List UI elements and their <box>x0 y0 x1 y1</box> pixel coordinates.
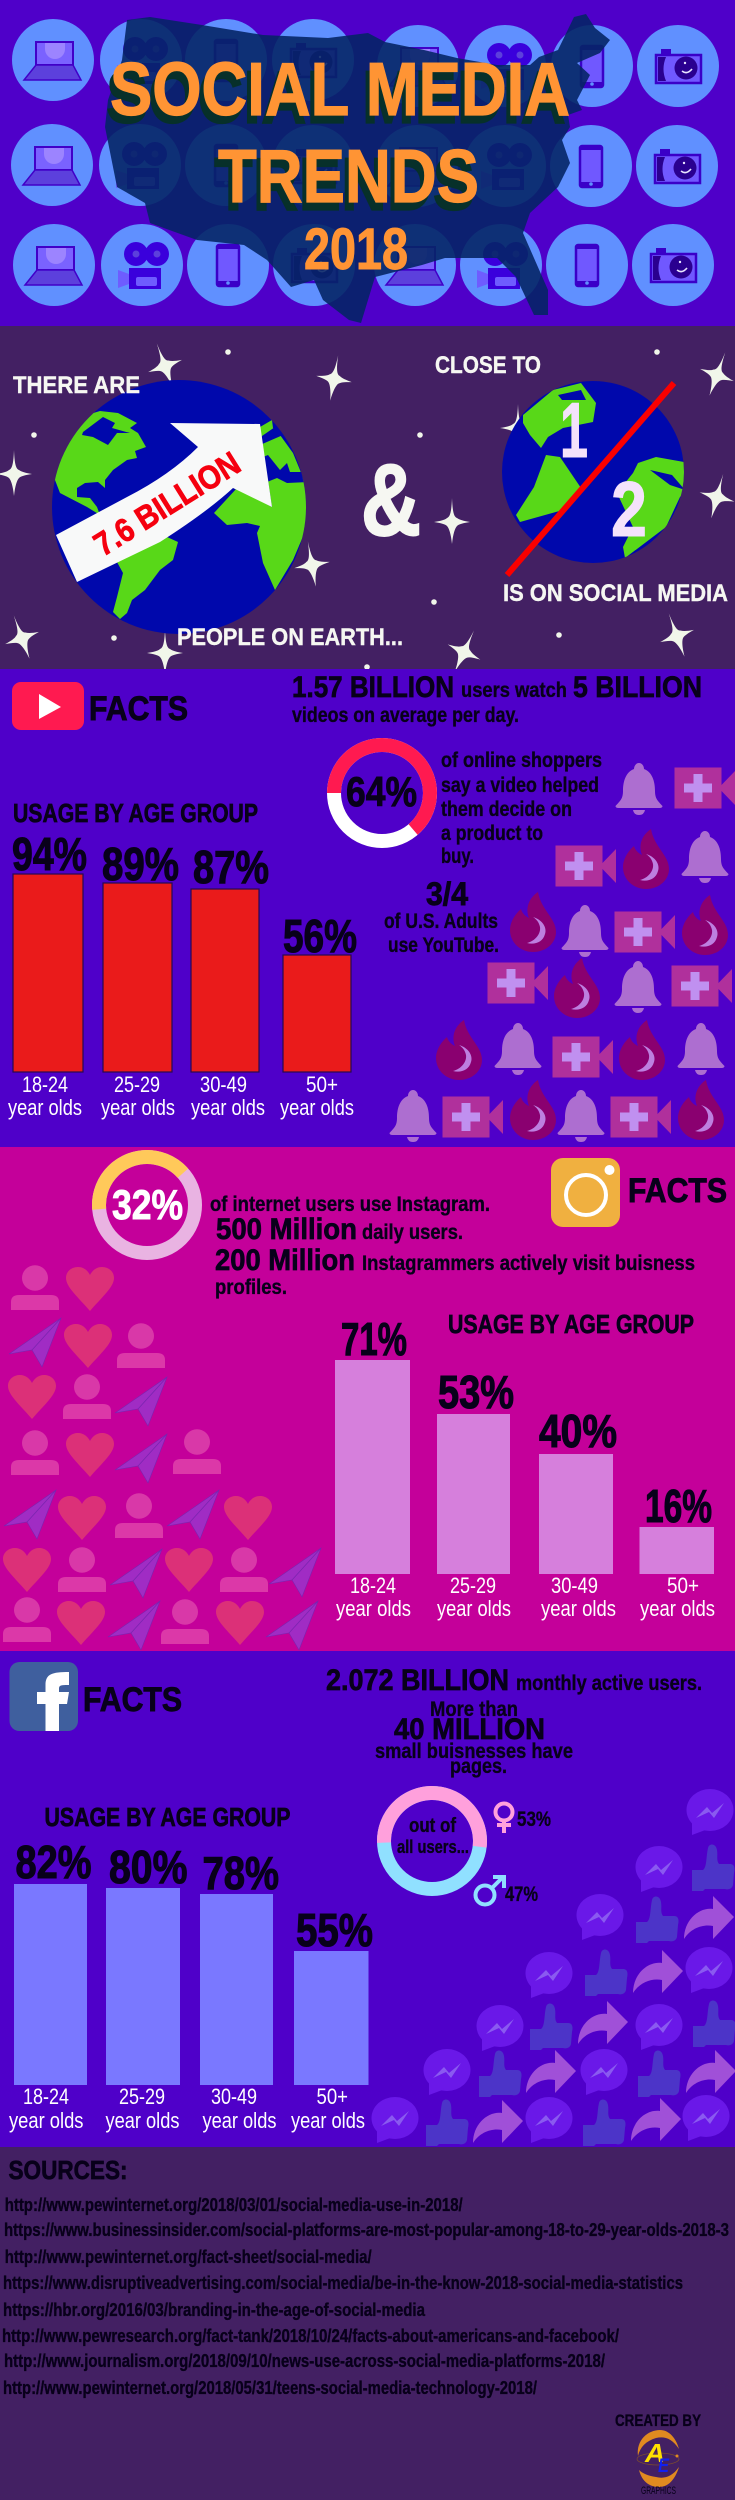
panel: Facebook facts <box>0 1651 735 2147</box>
text: source links: https://hbr.org/2016/03/branding-in-the-age-of-social-media <box>3 2300 426 2320</box>
bar: 18-24: 94% <box>12 828 87 880</box>
title: Social Media Trends 2018: TRENDS <box>218 134 479 218</box>
chart: gender donut <box>382 1791 482 1891</box>
bar: 25-29 <box>437 1366 514 1621</box>
bar: 50+: year olds <box>291 2108 365 2133</box>
title: Social Media Trends 2018: TRENDS <box>214 142 475 226</box>
legend: female 53%: 53% <box>517 1808 551 1831</box>
bar: 18-24: 18-24 <box>350 1573 396 1598</box>
icon: large earth with arrow <box>50 380 310 634</box>
logo: AE Graphics: E <box>658 2456 670 2477</box>
bar: 25-29: 80% <box>109 1841 188 1893</box>
text: Instagram statistics: 500 Million <box>216 1213 357 1246</box>
icon: Instagram logo <box>551 1158 620 1227</box>
heading: Facebook facts: FACTS <box>83 1681 182 1719</box>
bar: 50+: 50+ <box>316 2084 348 2109</box>
text: small businesses: small buisnesses have <box>375 1740 573 1763</box>
icon pattern: messenger, thumb, share <box>372 1789 735 2146</box>
text: users watch 5 billion: videos on average per day. <box>292 704 519 727</box>
text: three quarters of adults: of U.S. Adults <box>384 910 498 933</box>
text: small businesses <box>375 1698 573 1778</box>
logo: AE Graphics <box>637 2430 679 2497</box>
text: numeral 2: 2 <box>611 465 647 553</box>
text: Instagram statistics: 200 Million <box>215 1244 355 1277</box>
icon pattern: person, heart, plane <box>3 1265 321 1650</box>
text: source links <box>2 2195 729 2398</box>
icon pattern: bell, video, flame <box>390 763 735 1142</box>
panel: YouTube facts <box>0 669 735 1147</box>
text: users watch 5 billion: 1.57 BILLION <box>292 671 454 704</box>
text: online shoppers: say a video helped <box>441 774 599 797</box>
bar: 25-29 <box>101 838 179 1120</box>
bar: 50+ <box>640 1480 715 1621</box>
bar: 18-24: year olds <box>9 2108 84 2133</box>
text: Instagram statistics: daily users. <box>362 1221 463 1244</box>
text: small businesses: 40 MILLION <box>394 1713 545 1746</box>
text: three quarters of adults: 3/4 <box>426 876 468 912</box>
bar: 25-29: 53% <box>438 1366 514 1418</box>
bar: 30-49: year olds <box>202 2108 276 2133</box>
bar: 30-49: year olds <box>541 1596 616 1621</box>
bar: 50+: 55% <box>296 1904 373 1956</box>
bar: 18-24 <box>8 828 87 1120</box>
bar: 25-29: 25-29 <box>119 2084 165 2109</box>
bar: 50+ <box>280 910 357 1120</box>
bar chart: YouTube usage <box>8 828 357 1120</box>
bar: 18-24 <box>9 1836 92 2133</box>
bar: 30-49 <box>191 841 269 1120</box>
text: online shoppers: a product to <box>441 822 543 845</box>
text: source links: http://www.pewinternet.org/fact-sheet/social-media/ <box>5 2247 372 2267</box>
heading: Facebook usage by age group: USAGE BY AGE GROUP <box>44 1802 290 1832</box>
text: three quarters of adults <box>384 876 499 957</box>
bar: 25-29: year olds <box>437 1596 511 1621</box>
legend: male 47% <box>476 1877 538 1906</box>
bar: 30-49: 30-49 <box>551 1573 598 1598</box>
text: created by: CREATED BY <box>615 2411 702 2430</box>
icon: YouTube logo <box>12 682 84 730</box>
text: online shoppers: them decide on <box>441 798 572 821</box>
map: United States silhouette <box>105 14 610 323</box>
bar: 18-24: year olds <box>8 1095 82 1120</box>
text: source links: http://www.pewinternet.org/2018/05/31/teens-social-media-technology-2018/ <box>3 2378 537 2398</box>
title: Social Media Trends 2018: SOCIAL MEDIA <box>110 47 570 131</box>
title: Social Media Trends 2018 <box>106 47 570 282</box>
bar: 50+ <box>291 1904 373 2133</box>
text: users watch 5 billion: 5 BILLION <box>573 671 702 704</box>
heading: sources: SOURCES: <box>8 2155 128 2185</box>
text: small businesses: pages. <box>450 1755 507 1778</box>
text: online shoppers: buy. <box>441 845 474 868</box>
text: numeral 1: 1 <box>560 386 588 474</box>
text: source links: http://www.pewresearch.org/fact-tank/2018/10/24/facts-about-americans-and-facebook/ <box>2 2326 619 2346</box>
chart: 32% donut <box>95 1153 199 1257</box>
text: Instagram statistics: Instagrammers actively visit buisness <box>362 1252 695 1275</box>
bar: 18-24: 18-24 <box>22 1072 68 1097</box>
bar: 18-24: year olds <box>336 1596 411 1621</box>
bar chart: Facebook usage <box>9 1836 373 2133</box>
chart: 64% donut <box>334 745 430 841</box>
text: source links: http://www.journalism.org/2018/09/10/news-use-across-social-media-platforms-2018/ <box>4 2351 605 2371</box>
bar: 18-24 <box>335 1313 411 1621</box>
heading: YouTube usage by age group: USAGE BY AGE GROUP <box>13 798 258 828</box>
text: users watch 5 billion <box>292 671 702 727</box>
text: source links: http://www.pewinternet.org/2018/03/01/social-media-use-in-2018/ <box>5 2195 463 2215</box>
panel: Instagram facts <box>0 1147 735 1651</box>
text: monthly active users: monthly active users. <box>516 1672 702 1695</box>
icon pattern: media circles <box>11 19 719 306</box>
bar: 25-29: year olds <box>106 2108 180 2133</box>
text: there are: THERE ARE <box>13 372 140 399</box>
text: users watch 5 billion: users watch <box>461 679 567 702</box>
panel: sources <box>0 2147 735 2500</box>
panel: world population <box>0 326 735 680</box>
text: people on earth: PEOPLE ON EARTH... <box>177 624 403 651</box>
decorative stars <box>0 337 735 680</box>
bar: 30-49: 30-49 <box>200 1072 247 1097</box>
text: small businesses: More than <box>430 1698 518 1721</box>
bar: 25-29: year olds <box>101 1095 175 1120</box>
bar: 30-49: year olds <box>191 1095 265 1120</box>
text: Instagram statistics: profiles. <box>215 1276 287 1299</box>
bar: 30-49 <box>200 1847 279 2133</box>
panel: title header <box>0 0 735 326</box>
bar: 50+: year olds <box>280 1095 354 1120</box>
chart: 32% donut: 32% <box>112 1181 183 1228</box>
bar: 25-29: 25-29 <box>450 1573 496 1598</box>
text: three quarters of adults: use YouTube. <box>388 934 499 957</box>
text: close to: CLOSE TO <box>435 352 541 379</box>
bar: 25-29 <box>106 1841 188 2133</box>
text: ampersand: & <box>361 443 421 557</box>
logo: AE Graphics: GRAPHICS <box>641 2485 676 2497</box>
text: Instagram statistics: of internet users use Instagram. <box>210 1193 490 1216</box>
bar: 30-49 <box>539 1405 617 1621</box>
chart: gender donut: out of <box>409 1815 456 1837</box>
bar: 50+: 56% <box>283 910 357 962</box>
bar: 50+: 16% <box>645 1480 712 1532</box>
bar: 30-49: 30-49 <box>211 2084 257 2109</box>
bar: 50+: year olds <box>640 1596 715 1621</box>
legend: male 47%: 47% <box>505 1883 538 1906</box>
text: monthly active users: 2.072 BILLION <box>326 1664 509 1697</box>
bar: 50+: 50+ <box>667 1573 699 1598</box>
bar: 30-49: 87% <box>193 841 269 893</box>
bar: 50+: 50+ <box>306 1072 338 1097</box>
logo: AE Graphics: A <box>644 2438 665 2468</box>
text: online shoppers <box>441 749 602 868</box>
title: Social Media Trends 2018: SOCIAL MEDIA <box>106 55 566 139</box>
bar: 25-29: 89% <box>102 838 179 890</box>
icon: small earth showing one half <box>502 381 690 575</box>
bar: 30-49: 40% <box>539 1405 617 1457</box>
chart: gender donut: all users... <box>397 1837 469 1857</box>
bar: 25-29: 25-29 <box>114 1072 160 1097</box>
chart: 64% donut: 64% <box>346 768 417 815</box>
text: online shoppers: of online shoppers <box>441 749 602 772</box>
bar: 18-24: 18-24 <box>23 2084 69 2109</box>
bar: 18-24: 82% <box>16 1836 92 1888</box>
bar: 18-24: 71% <box>341 1313 407 1365</box>
text: 7.6 billion: 7.6 BILLION <box>87 444 247 563</box>
bar chart: Instagram usage <box>335 1313 715 1621</box>
icon: Facebook logo <box>10 1662 78 1731</box>
heading: YouTube facts: FACTS <box>89 690 188 728</box>
text: monthly active users <box>326 1664 702 1697</box>
title: Social Media Trends 2018: 2018 <box>304 217 408 282</box>
bar: 30-49: 78% <box>202 1847 279 1899</box>
text: Instagram statistics <box>210 1193 695 1299</box>
legend: female 53% <box>496 1804 551 1833</box>
